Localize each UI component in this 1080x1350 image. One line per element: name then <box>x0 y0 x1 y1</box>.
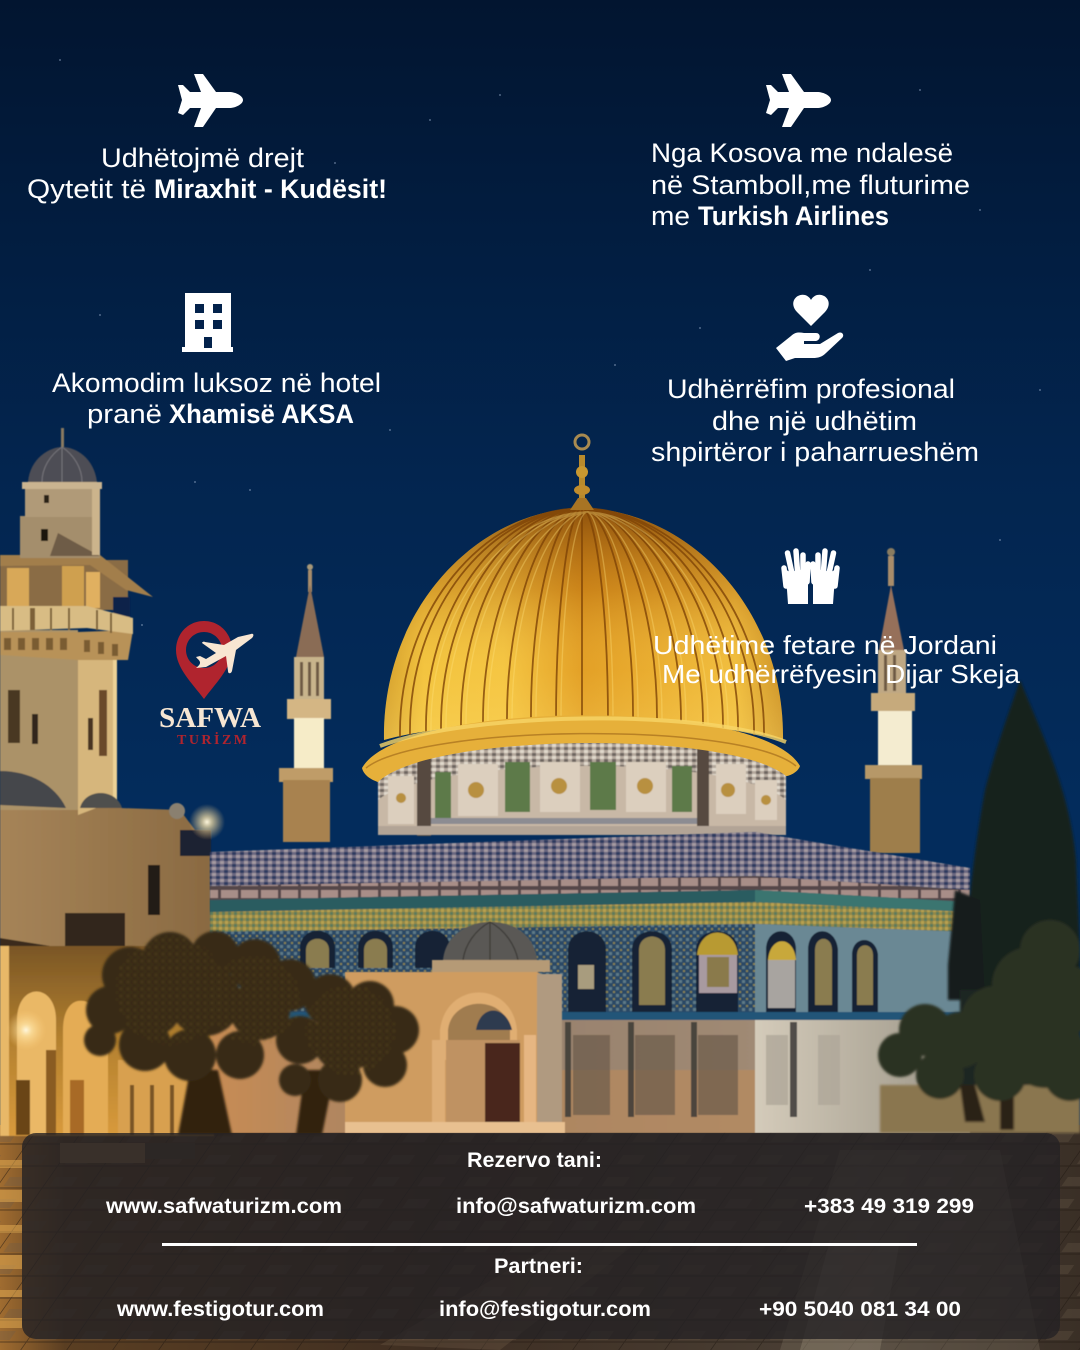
text: luxury hotel: Xhamisë AKSA <box>169 399 354 429</box>
photo: octagonal building with mosaic bands <box>210 832 970 1133</box>
text: professional guidance: dhe një udhëtim <box>712 406 917 436</box>
corbels <box>0 630 133 660</box>
text: religious trips in Jordan: Udhëtime fetare në Jordani <box>653 630 997 660</box>
text: luxury hotel: pranë <box>87 399 162 429</box>
icon: airplane <box>766 74 831 127</box>
balcony <box>0 560 128 610</box>
text: Turkish Airlines flights: Turkish Airlines <box>698 201 889 231</box>
text: luxury hotel: Akomodim luksoz në hotel <box>52 368 381 398</box>
photo: left trees <box>84 931 419 1135</box>
feature: religious trips in Jordan <box>653 551 1021 689</box>
booking phone: +383 49 319 299 <box>804 1195 974 1218</box>
text: flight to Holy City: Udhëtojmë drejt <box>101 143 305 173</box>
dome ribs <box>400 508 764 737</box>
icon: praying hands <box>783 551 838 604</box>
text: religious trips in Jordan: Me udhërrëfyesin Dijar Skeja <box>662 659 1021 689</box>
feature: professional guidance <box>651 295 979 467</box>
booking email: info@safwaturizm.com <box>456 1195 696 1218</box>
feature: Turkish Airlines flights <box>651 74 970 231</box>
text: Turkish Airlines flights: në Stamboll,me fluturime <box>651 170 970 200</box>
text: professional guidance: shpirtëror i paharrueshëm <box>651 437 979 467</box>
icon: hotel building <box>182 293 233 352</box>
text: Turkish Airlines flights: Nga Kosova me ndalesë <box>651 138 953 168</box>
logo subtitle: TURİZM <box>177 731 247 748</box>
text: flight to Holy City: Qytetit të <box>27 174 146 204</box>
upper cylinder <box>20 516 100 558</box>
photo: dome drum with tile panels <box>378 737 786 836</box>
tower faces <box>0 630 78 810</box>
logo plane <box>196 634 253 673</box>
text: professional guidance: Udhërrëfim profesional <box>667 374 955 404</box>
photo: right cypress and trees <box>878 680 1080 1133</box>
logo pin <box>176 621 232 699</box>
text: religious trips in Jordan <box>653 630 1021 689</box>
photo: left minaret tower and stone building <box>0 428 237 1136</box>
icon: airplane <box>178 74 243 127</box>
text: Turkish Airlines flights <box>651 138 970 231</box>
photo: left small minaret <box>279 564 333 842</box>
text: Turkish Airlines flights: me <box>651 201 690 231</box>
feature: luxury hotel <box>52 293 381 429</box>
heading: booking: Rezervo tani: <box>467 1149 602 1172</box>
photo: small domed portico <box>345 922 565 1133</box>
heading: partner: Partneri: <box>494 1255 583 1278</box>
partner website: www.festigotur.com <box>116 1298 324 1321</box>
logo name: SAFWA <box>159 703 262 734</box>
text: professional guidance <box>651 374 979 467</box>
logo: Safwa Turizm <box>159 621 262 748</box>
panel: contacts <box>22 1133 1060 1339</box>
text: flight to Holy City <box>27 143 387 204</box>
dome finial <box>570 435 594 510</box>
partner email: info@festigotur.com <box>439 1298 651 1321</box>
dome gold rim <box>362 715 800 782</box>
upper wall <box>0 800 211 1000</box>
photo: golden dome <box>362 435 800 782</box>
feature: flight to Holy City <box>27 74 387 204</box>
lower domes and lights <box>0 771 66 808</box>
booking website: www.safwaturizm.com <box>105 1195 342 1218</box>
photo: ground plaza <box>0 1125 1080 1350</box>
partner phone: +90 5040 081 34 00 <box>759 1298 961 1321</box>
icon: heart in hand <box>776 295 843 361</box>
photo: right small minaret <box>865 548 922 853</box>
text: flight to Holy City: Miraxhit - Kudësit! <box>154 174 387 204</box>
arcade <box>0 946 214 1136</box>
text: luxury hotel <box>52 368 381 429</box>
